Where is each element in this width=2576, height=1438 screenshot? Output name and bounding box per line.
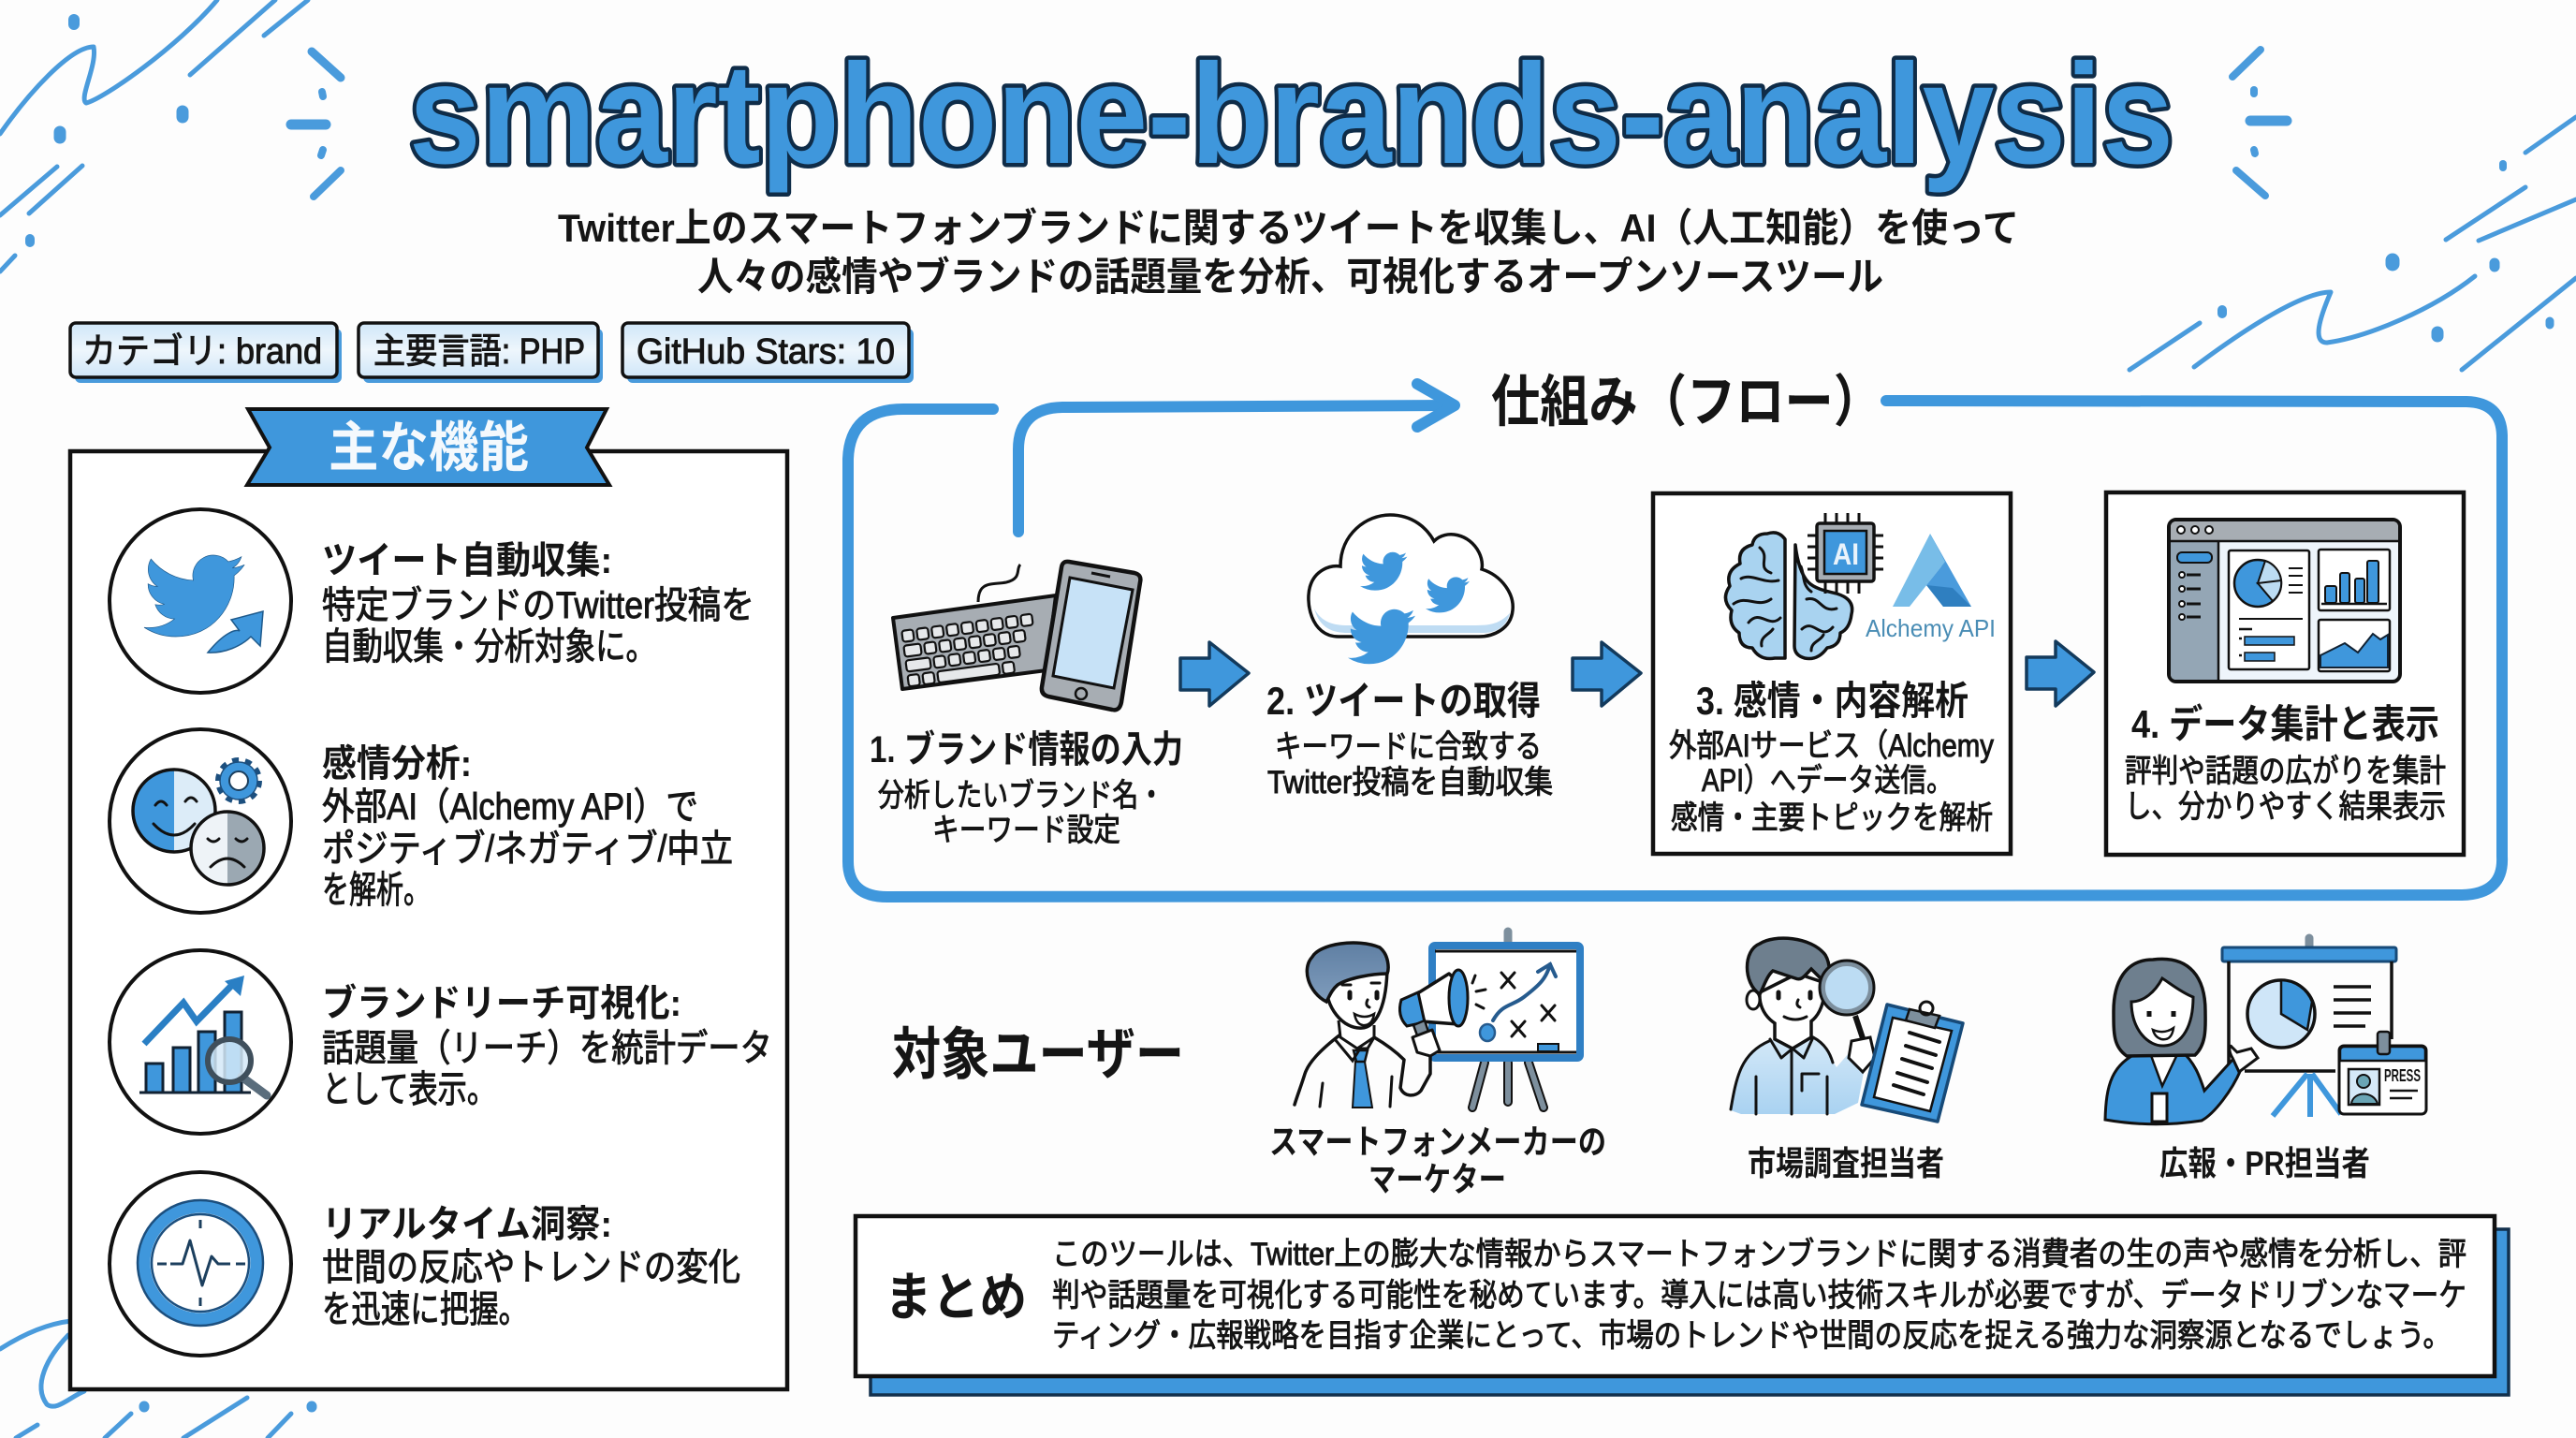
text: summary body — [1052, 1237, 2466, 1354]
panel: summary — [856, 1216, 2509, 1395]
text: step 3: 外部AIサービス（Alchemy — [1669, 728, 1994, 764]
text: tweet collection: ツイート自動収集: — [322, 540, 612, 581]
text: tweet collection: 特定ブランドのTwitter投稿を — [322, 585, 754, 626]
icon: marketer with megaphone and board — [1295, 932, 1580, 1108]
text: brand reach: 話題量（リーチ）を統計データ — [322, 1028, 772, 1069]
icon: bar chart with magnifier — [110, 950, 291, 1134]
decoration: top-left sketch strokes — [0, 0, 341, 271]
tag: category — [70, 323, 342, 383]
step 4: aggregation and display — [2106, 492, 2464, 855]
label: researcher: 市場調査担当者 — [1748, 1144, 1944, 1182]
text: sentiment analysis: 感情分析: — [322, 743, 472, 785]
logo: Alchemy API: Alchemy API — [1866, 614, 1996, 642]
label: PR staff: 広報・PR担当者 — [2159, 1144, 2370, 1182]
text: step 4: 評判や話題の広がりを集計 — [2125, 754, 2446, 789]
text: brand reach: ブランドリーチ可視化: — [322, 983, 681, 1024]
icon: twitter bird with arrow — [110, 509, 291, 693]
user: PR staff — [2105, 938, 2426, 1182]
text: step 4: し、分かりやすく結果表示 — [2125, 789, 2446, 825]
text: tweet collection — [322, 540, 754, 668]
tag: github stars: GitHub Stars: 10 — [637, 332, 895, 372]
text: step 1 — [870, 729, 1183, 848]
text: step 2: 2. ツイートの取得 — [1266, 679, 1541, 723]
step 2: fetch tweets — [1266, 515, 1553, 800]
icon: dashboard — [2169, 520, 2400, 682]
decoration: top-right sketch strokes — [2130, 50, 2576, 370]
logo: Alchemy API — [1866, 534, 1996, 642]
text: step 3: API）へデータ送信。 — [1702, 763, 1953, 799]
text: real-time insight: を迅速に把握。 — [322, 1289, 528, 1330]
icon: brain with AI chip — [1725, 513, 1883, 659]
text: step 1: 分析したいブランド名・ — [878, 778, 1164, 814]
subtitle: Twitter上のスマートフォンブランドに関するツイートを収集し、AI（人工知能）を使って — [558, 206, 2019, 250]
arrow: flow loop — [1018, 384, 1455, 532]
label: marketer: スマートフォンメーカーの — [1269, 1123, 1606, 1161]
step 1: brand input — [870, 562, 1183, 848]
text: step 3: 感情・主要トピックを解析 — [1671, 800, 1993, 836]
text: brand reach — [322, 983, 772, 1110]
text: step 2: Twitter投稿を自動収集 — [1267, 765, 1553, 800]
text: sentiment analysis: 外部AI（Alchemy API）で — [322, 786, 698, 828]
subtitle — [558, 206, 2019, 299]
label: marketer — [1269, 1123, 1606, 1198]
decoration: bottom-left sketch strokes — [0, 1321, 312, 1438]
text: sentiment analysis — [322, 743, 733, 911]
text: step 1: 1. ブランド情報の入力 — [870, 729, 1183, 770]
tag: language: 主要言語: PHP — [373, 332, 585, 372]
banner: main features heading: 主な機能 — [329, 418, 529, 478]
feature: brand reach visualization — [110, 950, 772, 1134]
tag: language — [359, 323, 603, 383]
tag: category: カテゴリ: brand — [82, 332, 322, 372]
label: marketer: マーケター — [1368, 1160, 1506, 1198]
text: brand reach: として表示。 — [322, 1069, 496, 1110]
icon: brain with AI chip: AI — [1833, 537, 1859, 571]
icon: PR staff with presentation and press badge — [2105, 938, 2426, 1124]
text: sentiment analysis: ポジティブ/ネガティブ/中立 — [322, 829, 733, 870]
heading: target users: 対象ユーザー — [892, 1023, 1184, 1086]
icon: cloud with birds — [1309, 515, 1513, 664]
text: step 3 — [1669, 679, 1994, 836]
heading: summary: まとめ — [885, 1268, 1027, 1327]
text: step 3: 3. 感情・内容解析 — [1696, 679, 1969, 723]
text: real-time insight: リアルタイム洞察: — [322, 1204, 612, 1245]
text: sentiment analysis: を解析。 — [322, 870, 431, 911]
text: step 2 — [1266, 679, 1553, 800]
panel: main features — [70, 409, 787, 1389]
step 3: sentiment analysis — [1653, 493, 2011, 854]
icon: keyboard and phone — [893, 562, 1140, 710]
arrow: step 1 to 2 — [1180, 642, 1249, 706]
feature: real-time insight — [110, 1172, 740, 1356]
icon: researcher with magnifier and clipboard — [1731, 938, 1963, 1122]
text: step 4 — [2125, 702, 2446, 825]
banner: main features heading — [247, 409, 609, 485]
icon: pulse gauge — [110, 1172, 291, 1356]
feature: tweet collection — [110, 509, 754, 693]
icon: happy and sad faces with gear — [110, 729, 291, 913]
user: marketer — [1269, 932, 1606, 1198]
text: step 4: 4. データ集計と表示 — [2131, 702, 2439, 746]
tag: github stars — [622, 323, 914, 383]
text: real-time insight — [322, 1204, 740, 1330]
subtitle: 人々の感情やブランドの話題量を分析、可視化するオープンソースツール — [697, 255, 1883, 299]
panel: flow frame — [848, 401, 2502, 897]
icon: PR staff with presentation and press badge: PRESS — [2384, 1066, 2421, 1085]
text: step 2: キーワードに合致する — [1275, 729, 1542, 765]
heading: flow: 仕組み（フロー） — [1491, 371, 1882, 433]
user: market researcher — [1731, 938, 1963, 1182]
text: step 1: キーワード設定 — [932, 813, 1120, 848]
text: tweet collection: 自動収集・分析対象に。 — [322, 626, 656, 668]
title: smartphone-brands-analysis — [409, 35, 2174, 194]
feature: sentiment analysis — [110, 729, 733, 913]
arrow: step 2 to 3 — [1573, 642, 1641, 706]
arrow: step 3 to 4 — [2027, 641, 2094, 706]
text: real-time insight: 世間の反応やトレンドの変化 — [322, 1247, 740, 1288]
